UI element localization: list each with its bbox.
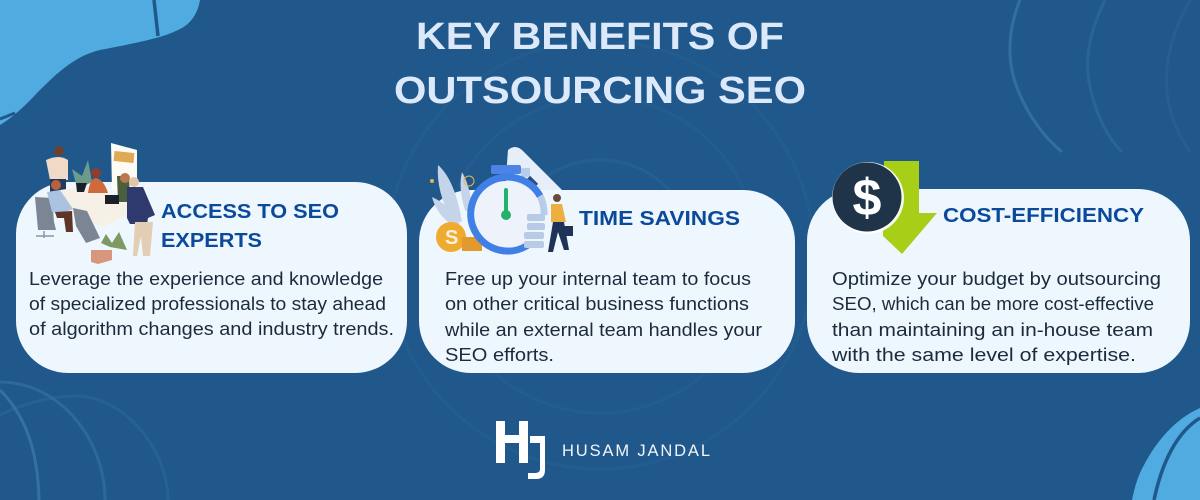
heading: ACCESS TO SEO bbox=[161, 200, 339, 223]
body text bbox=[444, 268, 762, 365]
body text: on other critical business functions bbox=[445, 293, 749, 314]
logo mark bbox=[496, 421, 545, 479]
panel: time savings bbox=[419, 147, 795, 373]
illustration: stopwatch bbox=[430, 147, 573, 252]
body text: than maintaining an in-house team bbox=[832, 319, 1153, 340]
panel: access to SEO experts bbox=[16, 143, 407, 373]
title: KEY BENEFITS OF bbox=[416, 16, 784, 58]
heading: EXPERTS bbox=[161, 229, 262, 252]
icon: down arrow with dollar coin bbox=[832, 161, 937, 254]
logo: Husam Jandal bbox=[496, 421, 710, 479]
illustration: team meeting bbox=[35, 143, 155, 264]
icon: down arrow with dollar coin: $ bbox=[853, 169, 882, 227]
logo wordmark: HUSAM JANDAL bbox=[562, 442, 710, 460]
decorative blob: bottom right bbox=[1132, 408, 1200, 500]
title: OUTSOURCING SEO bbox=[394, 70, 806, 112]
body text: SEO efforts. bbox=[445, 344, 554, 365]
body text: of algorithm changes and industry trends. bbox=[29, 318, 394, 339]
heading: COST-EFFICIENCY bbox=[943, 204, 1144, 227]
decorative blob: top left bbox=[0, 0, 200, 125]
body text bbox=[831, 268, 1161, 365]
body text: of specialized professionals to stay ahead bbox=[29, 293, 386, 314]
body text: with the same level of expertise. bbox=[831, 344, 1136, 365]
body text: Leverage the experience and knowledge bbox=[29, 268, 383, 289]
title bbox=[394, 16, 806, 112]
body text bbox=[29, 268, 394, 339]
body text: Free up your internal team to focus bbox=[445, 268, 751, 289]
body text: while an external team handles your bbox=[444, 319, 762, 340]
body text: Optimize your budget by outsourcing bbox=[832, 268, 1161, 289]
illustration: stopwatch: S bbox=[445, 227, 458, 249]
body text: SEO, which can be more cost-effective bbox=[832, 293, 1154, 314]
panel: cost-efficiency bbox=[807, 161, 1190, 373]
heading bbox=[161, 200, 339, 252]
heading: TIME SAVINGS bbox=[579, 207, 740, 230]
